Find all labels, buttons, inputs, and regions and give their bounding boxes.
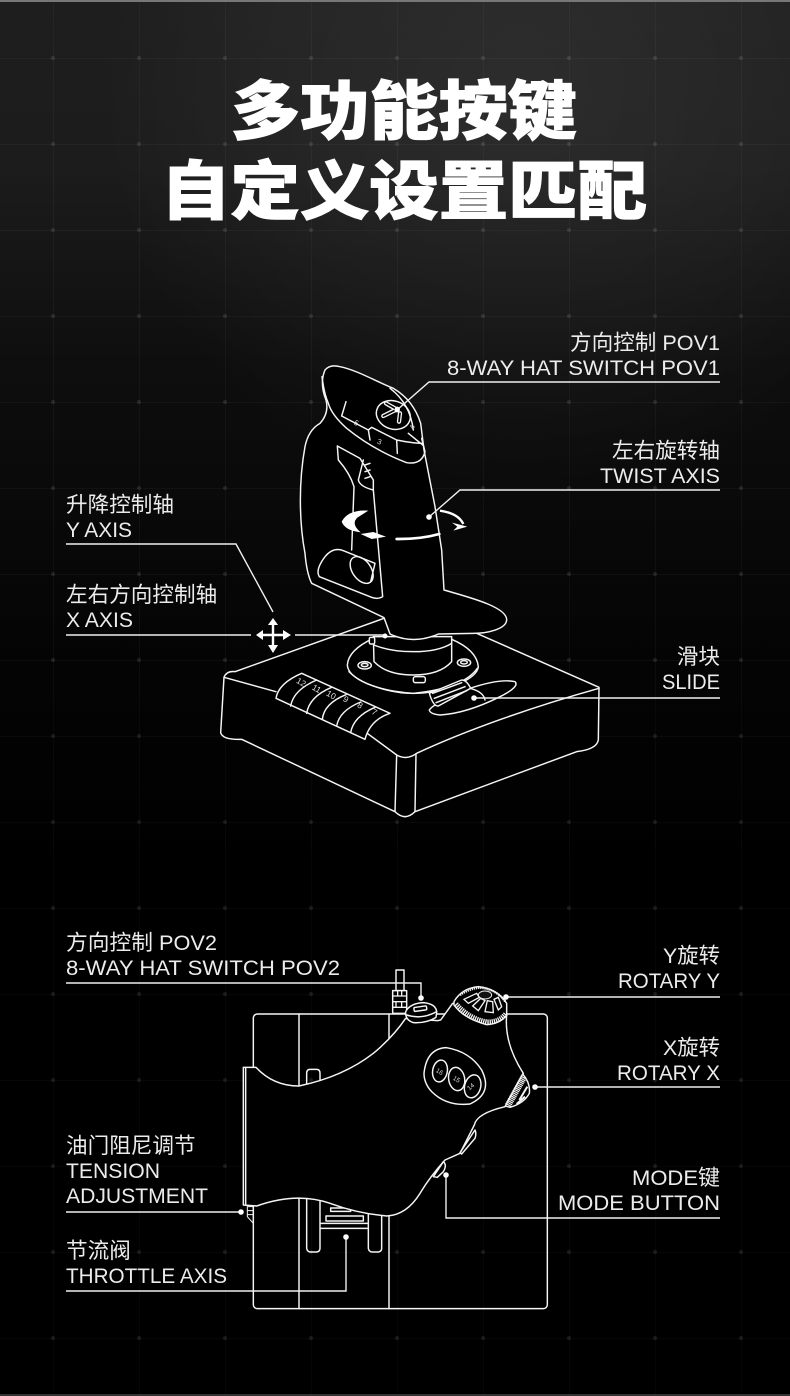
joystick grip: 4 — [407, 424, 417, 431]
label: y axis: 升降控制轴 — [66, 492, 174, 517]
label: mode button: MODE BUTTON — [558, 1190, 720, 1215]
label: twist axis — [426, 438, 720, 520]
title: 自定义设置匹配 — [161, 141, 647, 233]
buttons 14 15 16: 16 — [434, 1067, 444, 1077]
throttle body — [243, 1003, 523, 1216]
label: POV1: 方向控制 POV1 — [570, 330, 720, 355]
throttle illustration — [243, 970, 547, 1309]
label: mode button — [443, 1165, 720, 1218]
buttons 14 15 16: 14 — [466, 1082, 476, 1092]
label: throttle axis: 节流阀 — [66, 1238, 131, 1263]
label: rotary x: ROTARY X — [617, 1060, 720, 1085]
label: throttle axis: THROTTLE AXIS — [66, 1263, 227, 1288]
hat stalk — [393, 970, 407, 1013]
label: POV2: 方向控制 POV2 — [66, 930, 217, 955]
label: tension adjustment: ADJUSTMENT — [66, 1183, 208, 1208]
button strip 7 to 12: 9 — [341, 694, 351, 705]
label: POV2 — [66, 930, 424, 1001]
label: POV1 — [394, 330, 720, 412]
label: throttle axis — [66, 1234, 349, 1291]
icon: four-way arrow — [256, 618, 291, 653]
throttle frame — [253, 1014, 547, 1309]
rotary x dial — [505, 1074, 530, 1107]
button strip 7 to 12 — [276, 673, 390, 739]
joystick base — [221, 618, 599, 817]
label: x axis: X AXIS — [66, 607, 133, 632]
label: slide: SLIDE — [662, 669, 720, 694]
joystick grip — [300, 366, 507, 639]
button strip 7 to 12: 12 — [295, 675, 308, 689]
label: rotary y: ROTARY Y — [618, 968, 720, 993]
rotary y dial — [454, 987, 507, 1025]
label: POV1: 8-WAY HAT SWITCH POV1 — [447, 355, 720, 380]
label: POV2: 8-WAY HAT SWITCH POV2 — [66, 955, 340, 980]
label: slide: 滑块 — [677, 644, 720, 669]
mount flange — [347, 637, 478, 693]
label: mode button: MODE键 — [632, 1165, 720, 1190]
title — [161, 61, 647, 233]
button strip 7 to 12: 11 — [310, 682, 323, 695]
slide — [429, 680, 516, 715]
joystick grip: 5 — [352, 418, 360, 428]
joystick illustration — [221, 366, 599, 817]
label: twist axis: 左右旋转轴 — [612, 438, 720, 463]
mode buttons — [433, 1130, 476, 1177]
label: x axis — [66, 582, 388, 638]
button strip 7 to 12: 10 — [325, 688, 338, 702]
label: slide — [471, 644, 720, 701]
buttons 14 15 16 — [424, 1048, 486, 1104]
label: rotary x — [532, 1035, 720, 1090]
hat knob — [406, 1003, 437, 1023]
label: twist axis: TWIST AXIS — [600, 463, 720, 488]
joystick grip: 3 — [376, 437, 383, 447]
button strip 7 to 12: 7 — [370, 706, 379, 718]
label: tension adjustment: 油门阻尼调节 — [66, 1133, 196, 1158]
label: y axis: Y AXIS — [66, 517, 132, 542]
label: tension adjustment: TENSION — [66, 1158, 160, 1183]
throttle rails — [247, 1069, 382, 1252]
label: rotary y — [503, 943, 720, 1000]
label: y axis — [66, 492, 273, 612]
label: tension adjustment — [66, 1133, 244, 1215]
title: 多功能按键 — [231, 61, 577, 153]
label: rotary x: X旋转 — [663, 1035, 720, 1060]
label: x axis: 左右方向控制轴 — [66, 582, 217, 607]
button strip 7 to 12: 8 — [356, 700, 365, 711]
buttons 14 15 16: 15 — [451, 1075, 461, 1085]
label: rotary y: Y旋转 — [663, 943, 720, 968]
